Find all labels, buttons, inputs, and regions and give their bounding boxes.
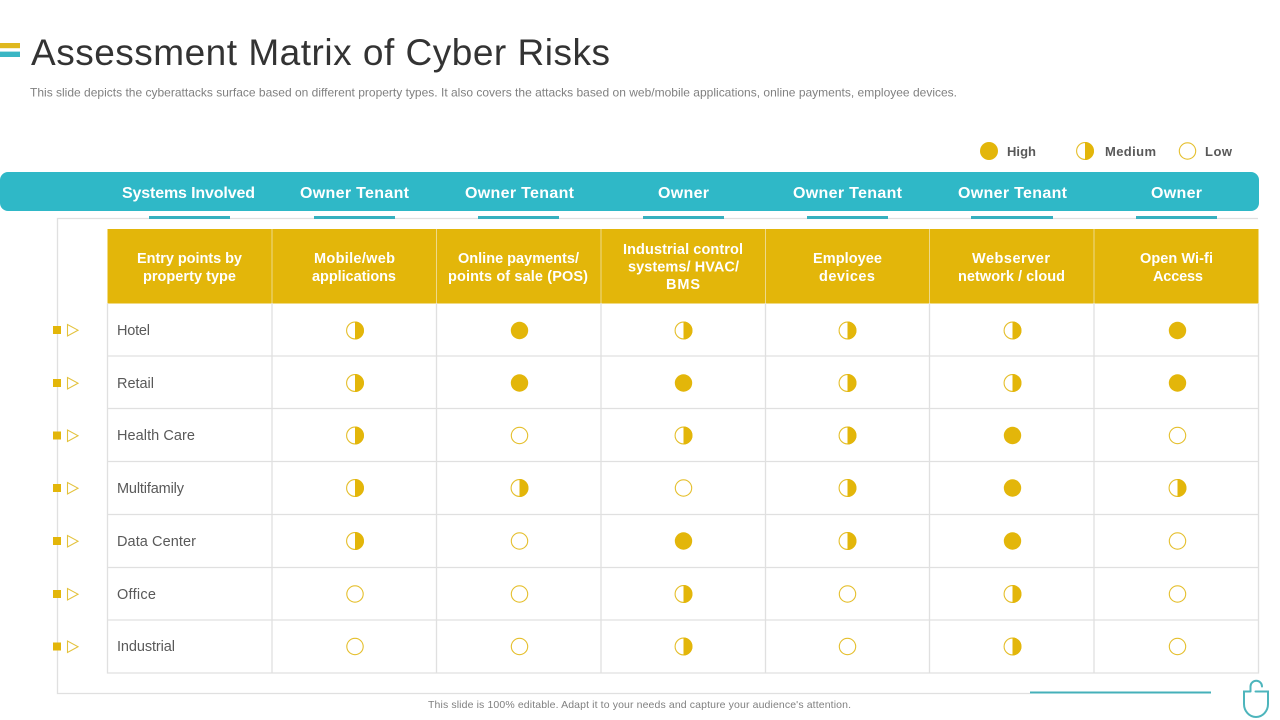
yellow table header: Industrial control <box>623 242 743 258</box>
icon: mouse <box>1244 681 1268 717</box>
subtitle: This slide depicts the cyberattacks surface based on different property types. It also covers the attacks based on web/mobile applications, online payments, employee devices. <box>30 86 957 100</box>
title: Assessment Matrix of Cyber Risks <box>31 32 610 73</box>
row: Multifamily: Multifamily <box>117 481 185 497</box>
teal column ticks <box>149 216 1217 219</box>
legend: medium: Medium <box>1105 144 1156 159</box>
title accent bars <box>0 43 20 57</box>
row: Health Care: Health Care <box>117 428 195 444</box>
row: Industrial <box>53 638 1186 656</box>
legend: low: Low <box>1205 144 1233 159</box>
row: Office <box>53 585 1186 603</box>
legend <box>980 142 1233 160</box>
yellow table header: applications <box>312 269 396 285</box>
yellow table header: property type <box>143 269 236 285</box>
yellow table header: Online payments/ <box>458 251 579 267</box>
yellow table header: points of sale (POS) <box>448 269 588 285</box>
legend: high <box>980 142 1036 160</box>
yellow table header: Access <box>1153 269 1203 285</box>
legend: medium <box>1077 142 1156 160</box>
yellow table header: Employee <box>813 251 882 267</box>
yellow table header: Mobile/web <box>314 251 395 267</box>
row: Data Center <box>53 532 1186 550</box>
legend: high: High <box>1007 144 1036 159</box>
table grid <box>108 303 1258 673</box>
teal header band: Systems Involved <box>122 185 255 202</box>
row: Health Care <box>53 426 1186 444</box>
yellow table header: Open Wi-fi <box>1140 251 1213 267</box>
teal header band: Owner Tenant <box>958 185 1068 202</box>
row: Data Center: Data Center <box>117 534 196 550</box>
yellow table header: BMS <box>666 277 700 293</box>
teal header band <box>0 172 1259 211</box>
yellow table header: devices <box>819 269 875 285</box>
teal header band: Owner Tenant <box>793 185 903 202</box>
yellow table header <box>108 229 1258 304</box>
teal footer line <box>1030 692 1211 694</box>
teal header band: Owner <box>1151 185 1202 202</box>
teal header band: Owner Tenant <box>300 185 410 202</box>
teal header band: Owner <box>658 185 709 202</box>
row: Retail: Retail <box>117 376 154 392</box>
yellow table header: systems/ HVAC/ <box>628 260 739 276</box>
row: Industrial: Industrial <box>117 639 175 655</box>
row: Office: Office <box>117 587 156 603</box>
row: Multifamily <box>53 479 1186 497</box>
yellow table header: Webserver <box>972 251 1050 267</box>
yellow table header: Entry points by <box>137 251 242 267</box>
row: Retail <box>53 374 1186 392</box>
legend: low <box>1179 143 1233 159</box>
outer frame <box>58 218 1258 694</box>
row: Hotel: Hotel <box>117 323 150 339</box>
row: Hotel <box>53 322 1186 340</box>
teal header band: Owner Tenant <box>465 185 575 202</box>
yellow table header: network / cloud <box>958 269 1065 285</box>
footer note: This slide is 100% editable. Adapt it to your needs and capture your audience's attention. <box>428 699 851 711</box>
